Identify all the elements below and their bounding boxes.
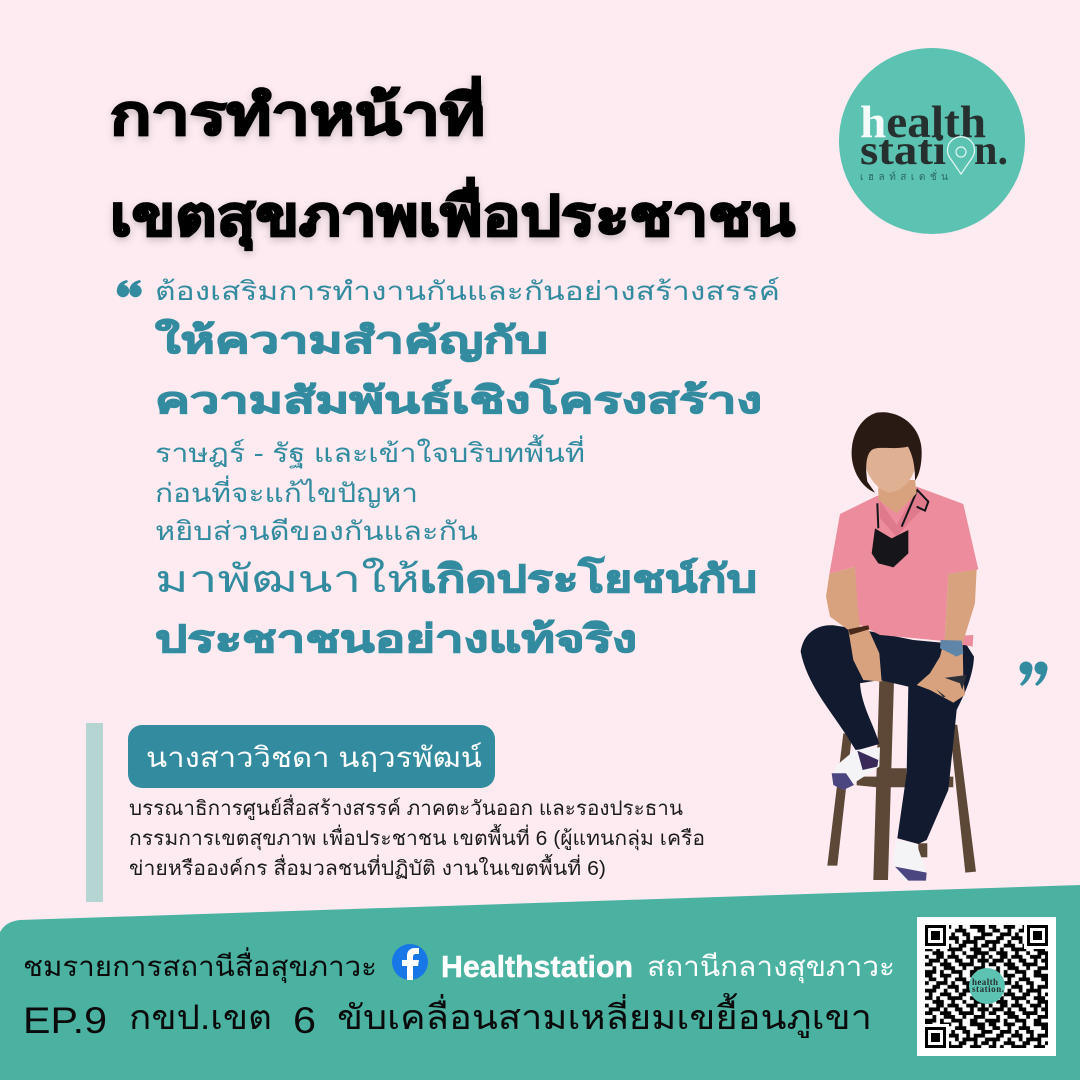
bottom band [0, 885, 1080, 1080]
collar and mask [879, 490, 928, 537]
arms [826, 567, 882, 682]
QR code: station. [972, 984, 1004, 994]
title: เขตสุขภาพเพื่อประชาชน [110, 177, 795, 251]
shoe right [893, 840, 927, 881]
logo: health station: n. [974, 128, 1008, 174]
bottom text line 1: สถานีกลางสุขภาวะ [647, 951, 895, 984]
speaker description [129, 794, 705, 880]
quote text: ความสัมพันธ์เชิงโครงสร้าง [155, 378, 762, 421]
quote text: ราษฎร์ - รัฐ และเข้าใจบริบทพื้นที่ [155, 434, 585, 469]
bottom text line 1: ชมรายการสถานีสื่อสุขภาวะ [23, 947, 377, 984]
bottom text line 1 [23, 944, 895, 984]
bracelet [848, 625, 869, 635]
logo: health station [839, 48, 1025, 234]
title [110, 76, 795, 251]
name badge: นางสาววิชดา นฤวรพัฒน์ [146, 742, 482, 773]
quote text: ก่อนที่จะแก้ไขปัญหา [155, 475, 418, 508]
bottom text line 2: EP.9 [23, 1000, 107, 1041]
quote text: ให้ความสำคัญกับ [155, 318, 548, 362]
bottom text line 2: ขับเคลื่อนสามเหลี่ยมเขยื้อนภูเขา [337, 993, 872, 1038]
speaker description: ข่ายหรือองค์กร สื่อมวลชนที่ปฏิบัติ งานในเขตพื้นที่ 6) [129, 854, 606, 880]
QR code [917, 917, 1056, 1056]
logo: health station: stati [860, 128, 946, 174]
quote text [155, 276, 780, 661]
bottom text line 2: 6 [293, 1000, 316, 1041]
QR code: health [972, 977, 998, 987]
neck and head [878, 480, 917, 513]
bottom text line 1: Healthstation [441, 949, 633, 984]
speaker description: บรรณาธิการศูนย์สื่อสร้างสรรค์ ภาคตะวันออก และรองประธาน [129, 794, 683, 821]
photo: seated speaker on stool [801, 412, 978, 881]
logo: health station: health [860, 97, 986, 147]
watch [940, 640, 963, 657]
accent bar [86, 723, 103, 902]
quote text: หยิบส่วนดีของกันและกัน [155, 516, 478, 546]
speaker description: กรรมการเขตสุขภาพ เพื่อประชาชน เขตพื้นที่ 6 (ผู้แทนกลุ่ม เครือ [129, 824, 705, 851]
shoe left [832, 747, 880, 790]
icon: closing quote [1020, 662, 1048, 686]
quote text: ประชาชนอย่างแท้จริง [155, 619, 637, 661]
stool [827, 681, 976, 880]
title: การทำหน้าที่ [110, 76, 485, 146]
quote text: ต้องเสริมการทำงานกันและกันอย่างสร้างสรรค์ [155, 276, 780, 306]
bottom text line 2 [23, 993, 872, 1041]
shirt [829, 487, 978, 647]
quote text: เกิดประโยชน์กับ [420, 556, 757, 601]
icon: opening quote [117, 280, 142, 297]
icon: facebook [392, 944, 428, 980]
quote text: มาพัฒนาให้ [155, 558, 420, 601]
phone [928, 675, 967, 697]
trousers [801, 625, 974, 844]
bottom text line 2: กขป.เขต [129, 999, 272, 1037]
name badge [128, 725, 495, 788]
logo: health station: เฮลท์สเตชั่น [860, 169, 948, 183]
